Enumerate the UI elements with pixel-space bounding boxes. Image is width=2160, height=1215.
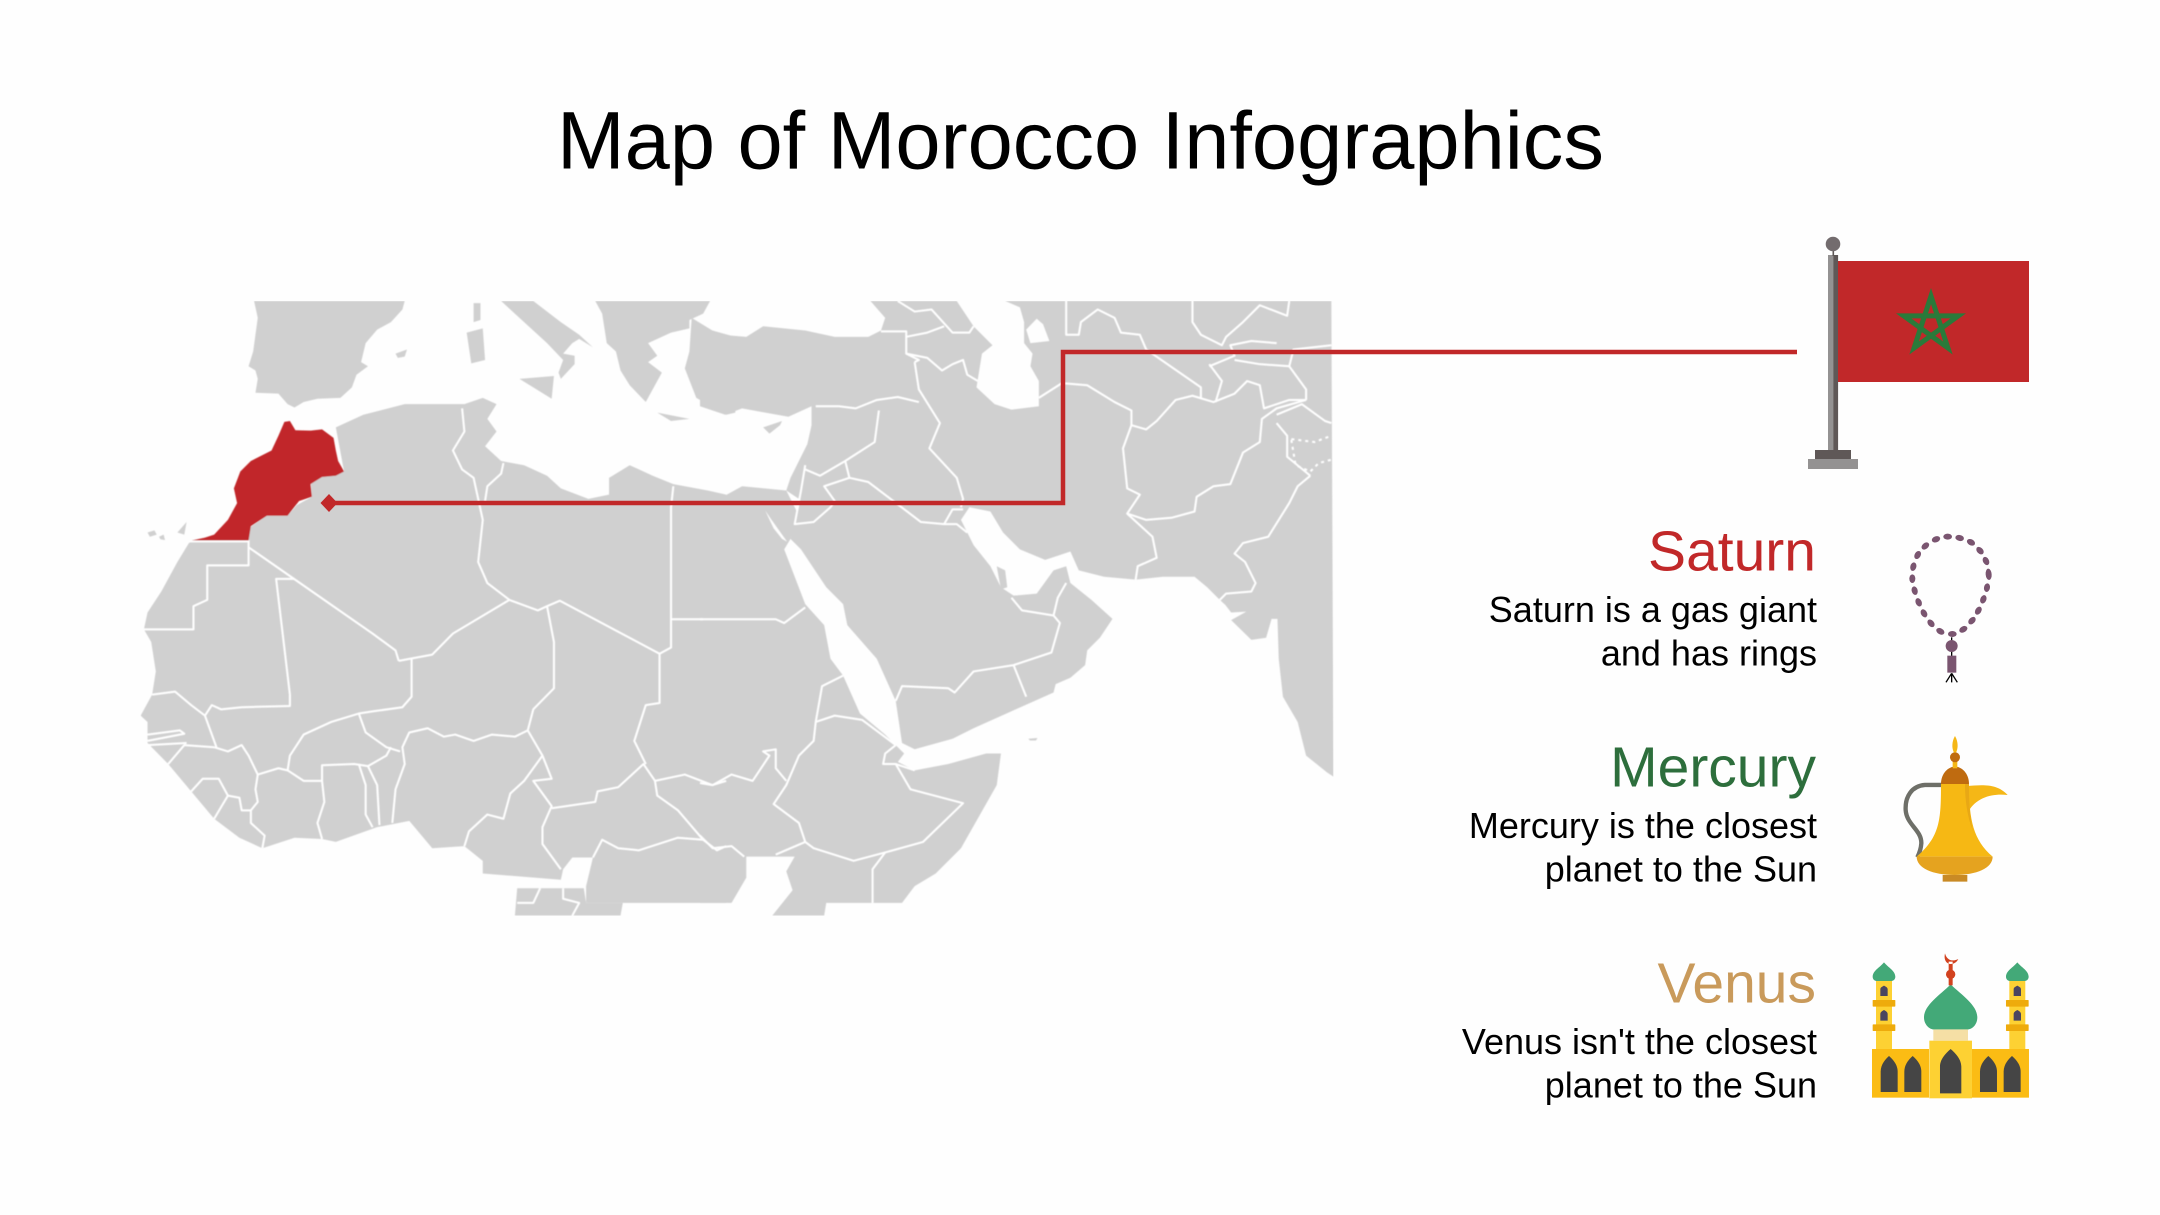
text block: saturn: Saturn bbox=[1648, 520, 1816, 584]
text block: venus: Venus bbox=[1658, 952, 1816, 1016]
connector line from morocco to flag bbox=[320, 352, 1797, 512]
title: Map of Morocco Infographics bbox=[557, 96, 1604, 186]
text block: venus bbox=[1462, 952, 1817, 1106]
text block: mercury bbox=[1469, 736, 1817, 890]
map of north africa and the middle east bbox=[141, 301, 1333, 916]
text block: venus: Venus isn't the closest bbox=[1462, 1021, 1817, 1062]
text block: mercury: Mercury is the closest bbox=[1469, 805, 1817, 846]
icon: prayer beads bbox=[1909, 534, 1992, 682]
icon: coffee pot bbox=[1906, 736, 2008, 882]
text block: venus: planet to the Sun bbox=[1545, 1064, 1817, 1106]
seas bbox=[765, 511, 787, 542]
text block: mercury: Mercury bbox=[1610, 736, 1816, 800]
text block: saturn bbox=[1489, 520, 1817, 674]
text block: saturn: and has rings bbox=[1601, 632, 1817, 674]
morocco bbox=[192, 421, 344, 541]
text block: mercury: planet to the Sun bbox=[1545, 848, 1817, 890]
marker diamond bbox=[320, 494, 338, 512]
text block: saturn: Saturn is a gas giant bbox=[1489, 589, 1817, 630]
icon: mosque bbox=[1872, 953, 2029, 1098]
icon: moroccan flag bbox=[1808, 237, 2029, 469]
borders east bbox=[816, 397, 919, 408]
